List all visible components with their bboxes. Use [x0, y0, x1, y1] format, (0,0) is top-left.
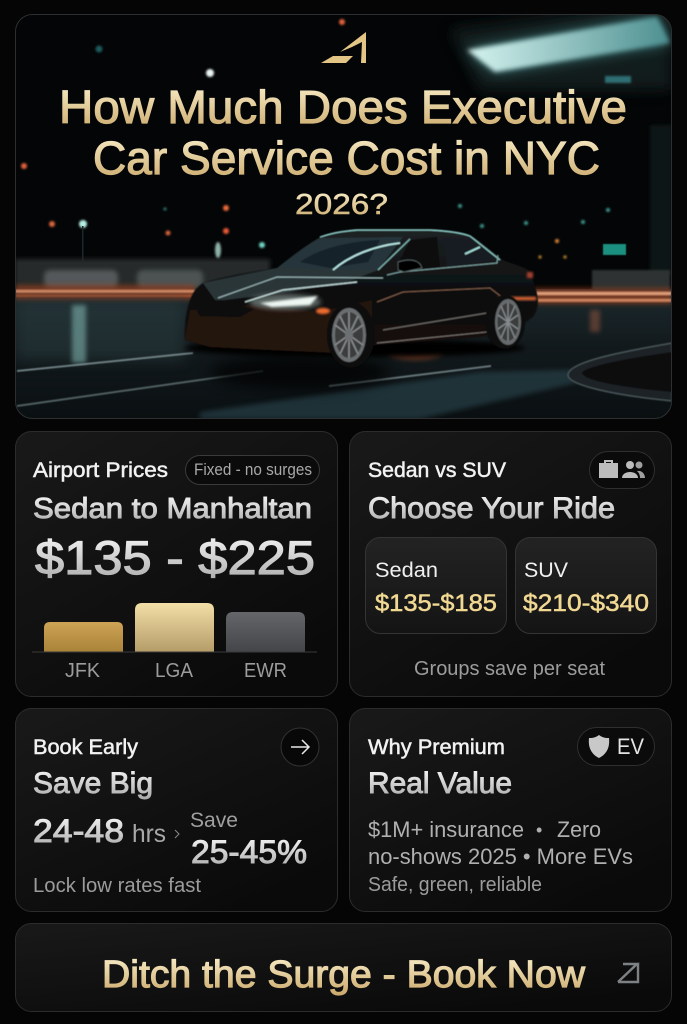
- panel heading: Airport Prices: [33, 459, 168, 482]
- icon: arrow button: [281, 728, 319, 766]
- panel heading: Sedan vs SUV: [368, 459, 506, 482]
- subtitle year: 2026?: [295, 189, 388, 221]
- logo: [321, 32, 366, 63]
- benefits list: [368, 817, 633, 896]
- panel: why premium: [350, 708, 672, 912]
- stat: savings: [190, 809, 307, 870]
- badge: luggage and passengers icons: [590, 452, 654, 488]
- benefits list: Safe, green, reliable: [368, 874, 542, 896]
- badge: fixed no surges: [186, 456, 320, 484]
- icon: arrow triangle: [618, 964, 638, 982]
- bar chart: JFK: [65, 660, 101, 682]
- card: suv: SUV: [524, 559, 568, 582]
- caption: Lock low rates fast: [33, 875, 201, 897]
- light trails: [15, 285, 672, 304]
- badge: fixed no surges: Fixed - no surges: [194, 461, 312, 479]
- headline: Real Value: [368, 767, 512, 800]
- night scene with car: [15, 0, 672, 419]
- headline: Sedan to Manhaltan: [33, 493, 312, 525]
- title: [59, 81, 627, 184]
- call to action text: Ditch the Surge - Book Now: [102, 954, 586, 996]
- car: [185, 229, 538, 368]
- rear wheel: [485, 295, 525, 349]
- panel: sedan vs suv: [350, 432, 672, 696]
- badge: shield and EV: EV: [617, 734, 644, 759]
- price range: $135 - $225: [35, 531, 315, 584]
- benefits list: Zero: [557, 817, 601, 842]
- benefits list: •: [536, 820, 542, 840]
- benefits list: no-shows 2025 • More EVs: [368, 844, 633, 869]
- curb: [568, 343, 672, 401]
- card: sedan: $135-$185: [375, 590, 497, 617]
- wet road reflections: [15, 300, 640, 419]
- bar chart: EWR: [244, 660, 287, 682]
- panel: hero photo: [15, 0, 672, 419]
- benefits list: $1M+ insurance: [368, 817, 524, 842]
- title: How Much Does Executive: [59, 81, 627, 133]
- panel: airport prices: [16, 432, 338, 696]
- headline: Choose Your Ride: [368, 492, 615, 525]
- stat: booking window: [33, 813, 179, 849]
- card: suv: $210-$340: [523, 590, 649, 617]
- bar chart: LGA: [155, 660, 194, 682]
- card: sedan: [366, 538, 506, 634]
- badge: shield and EV: [578, 728, 654, 766]
- panel: call to action: [16, 924, 672, 1012]
- stat: savings: Save: [190, 809, 238, 832]
- card: sedan: Sedan: [375, 559, 438, 582]
- title: Car Service Cost in NYC: [93, 132, 600, 184]
- headline: Save Big: [33, 767, 153, 800]
- stat: booking window: hrs: [132, 820, 166, 848]
- caption: Groups save per seat: [414, 658, 605, 680]
- stat: booking window: 24-48: [33, 813, 124, 849]
- panel: book early: [16, 708, 338, 912]
- panel heading: Book Early: [33, 736, 139, 759]
- stat: savings: 25-45%: [191, 834, 307, 870]
- panel heading: Why Premium: [368, 736, 505, 759]
- front wheel: [327, 302, 375, 368]
- card: suv: [516, 538, 656, 634]
- bar chart: [32, 603, 317, 682]
